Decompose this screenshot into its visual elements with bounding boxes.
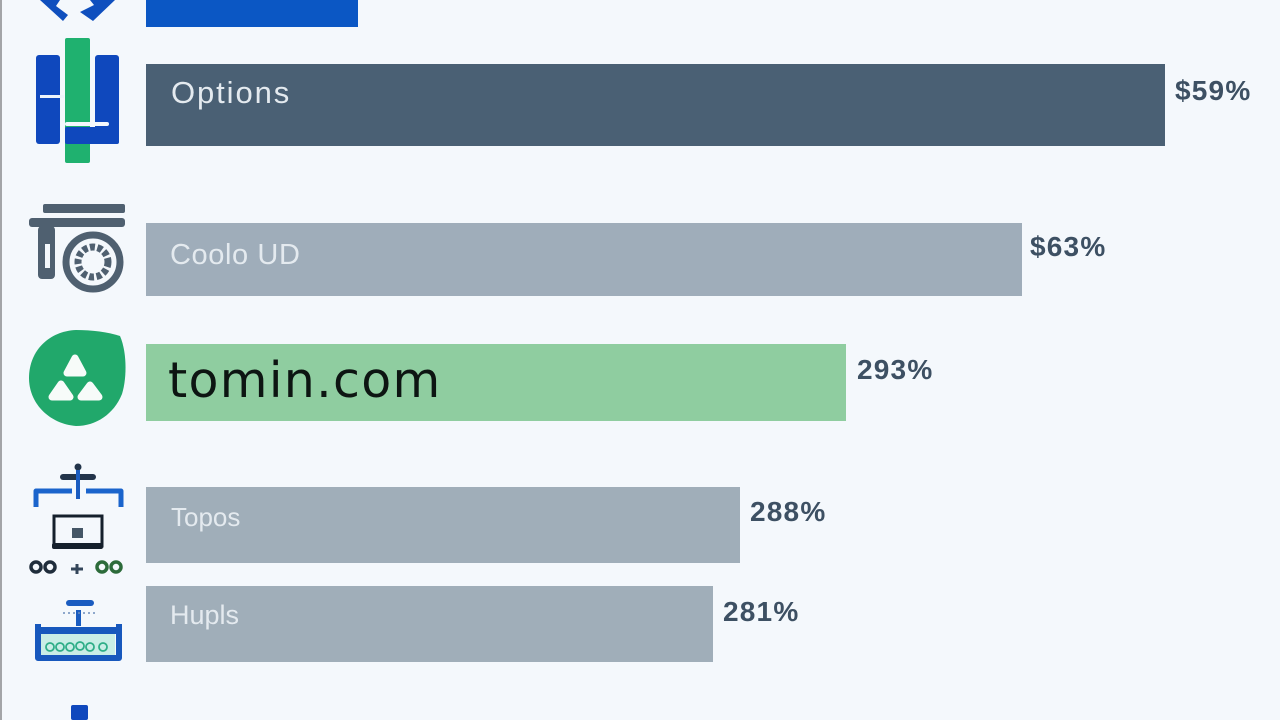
bar: Options	[146, 64, 1165, 146]
icon: blue tank	[38, 600, 119, 658]
bar: Topos	[146, 487, 740, 563]
icon: green leaf with triangles	[29, 330, 126, 426]
row: Topos	[31, 464, 826, 574]
label: Options: Options	[171, 75, 291, 110]
label: Coolo UD: Coolo UD	[170, 239, 301, 271]
label: Topos: Topos	[171, 502, 240, 532]
row: cropped top bar	[40, 0, 358, 27]
row: tomin.com	[29, 330, 933, 426]
label: tomin.com: tomin.com	[168, 352, 442, 409]
value: Topos: 288%	[750, 496, 826, 527]
value: Hupls: 281%	[723, 596, 799, 627]
row: Hupls	[38, 586, 799, 662]
icon: blue and green blocks	[36, 38, 119, 163]
value: Coolo UD: $63%	[1030, 231, 1106, 262]
value: tomin.com: 293%	[857, 354, 933, 385]
row: Options	[36, 38, 1251, 163]
icon: network with monitor	[31, 464, 121, 574]
bar: tomin.com	[146, 344, 846, 421]
icon: blue chevrons	[40, 0, 115, 21]
value: Options: $59%	[1175, 75, 1251, 106]
bar: Coolo UD	[146, 223, 1022, 296]
bar: Hupls	[146, 586, 713, 662]
icon: cropped blue stem	[71, 705, 88, 720]
label: Hupls: Hupls	[170, 600, 239, 630]
bar: top blue	[146, 0, 358, 27]
icon: bars and wheel	[29, 204, 125, 289]
row: Coolo UD	[29, 204, 1106, 296]
